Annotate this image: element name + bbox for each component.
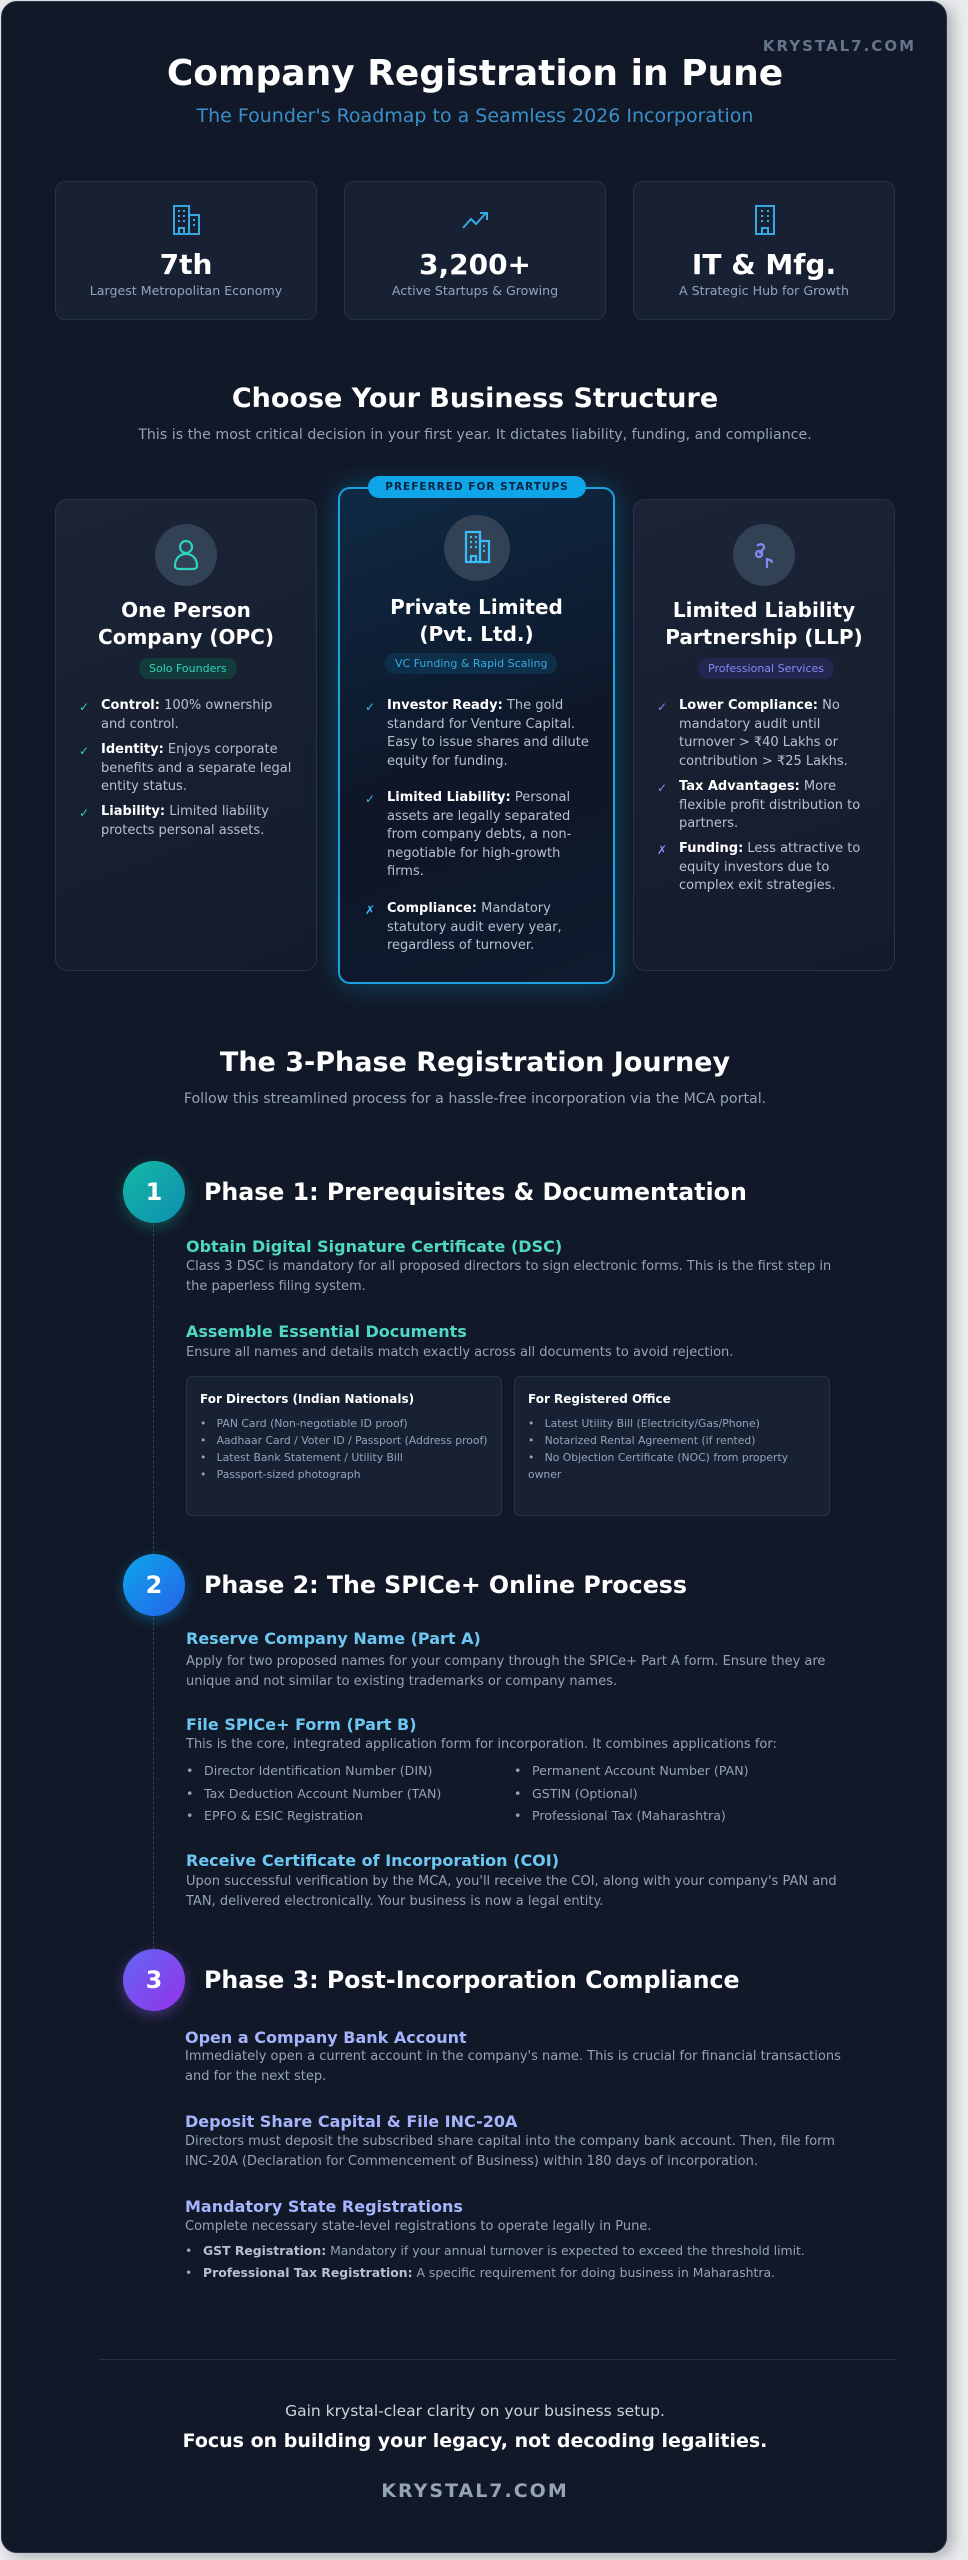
- stat: 7th: 7th: [160, 248, 212, 281]
- phase 2: File SPICe+ Form (Part B): [186, 1715, 417, 1734]
- doc box: directors: Latest Bank Statement / Utility Bill: [217, 1451, 403, 1464]
- panel: OPC: ✓: [79, 744, 89, 758]
- phase 3 badge: [123, 1949, 185, 2011]
- panel: Private Limited: ✓: [365, 792, 375, 806]
- phase 2 badge: [123, 1554, 185, 1616]
- phase 2: Permanent Account Number (PAN): [532, 1763, 749, 1778]
- phase 3: Immediately open a current account in the company's name. This is crucial for financial transactions and for the next step.: [185, 2049, 841, 2084]
- panel: Private Limited: (Pvt. Ltd.): [419, 622, 534, 646]
- phase 2: Upon successful verification by the MCA, you'll receive the COI, along with your company's PAN and TAN, delivered electronically. Your business is now a legal entity.: [186, 1874, 837, 1909]
- panel: OPC: Control: 100% ownership and control.: [101, 698, 272, 732]
- doc box: office: [514, 1376, 830, 1516]
- subheading: This is the most critical decision in your first year. It dictates liability, funding, and compliance.: [138, 427, 812, 443]
- stat: 3,200+: 3,200+: [419, 248, 531, 281]
- stat: 7th: Largest Metropolitan Economy: [90, 283, 282, 298]
- icon: handshake: [733, 524, 795, 586]
- panel: LLP: Lower Compliance: No mandatory audit until turnover > ₹40 Lakhs or contribution > ₹25 Lakhs.: [679, 698, 848, 768]
- panel: LLP: ✗: [657, 843, 667, 857]
- phase 3: Mandatory State Registrations: [185, 2197, 463, 2216]
- phase 2: Tax Deduction Account Number (TAN): [204, 1786, 441, 1801]
- stat: IT & Mfg: [633, 181, 895, 320]
- panel: OPC: One Person: [121, 598, 251, 622]
- panel: OPC: Identity: Enjoys corporate benefits and a separate legal entity status.: [101, 742, 291, 794]
- panel: Private Limited: Compliance: Mandatory statutory audit every year, regardless of turnover.: [387, 901, 562, 953]
- panel: LLP: ✓: [657, 781, 667, 795]
- doc box: office: Latest Utility Bill (Electricity/Gas/Phone): [545, 1417, 760, 1430]
- stat: 3,200+: [344, 181, 606, 320]
- panel: OPC: ✓: [79, 806, 89, 820]
- heading: journey: The 3-Phase Registration Journey: [220, 1047, 730, 1078]
- doc box: office: For Registered Office: [528, 1392, 671, 1406]
- footer: Gain krystal-clear clarity on your business setup.: [285, 2402, 665, 2420]
- phase 3: Directors must deposit the subscribed share capital into the company bank account. Then, file form INC-20A (Declaration for Commencement of Business) within 180 days of incorporation.: [185, 2134, 835, 2169]
- footer: [183, 2402, 767, 2502]
- icon: buildings: [444, 515, 510, 581]
- panel: Private Limited: [338, 487, 615, 984]
- phase 2: Receive Certificate of Incorporation (COI): [186, 1851, 559, 1870]
- panel: Private Limited: ✓: [365, 700, 375, 714]
- phase 2: Apply for two proposed names for your company through the SPICe+ Part A form. Ensure they are unique and not similar to existing trademarks or company names.: [186, 1654, 825, 1689]
- phase 2: This is the core, integrated application form for incorporation. It combines applications for:: [186, 1737, 777, 1752]
- panel: Private Limited: Private Limited: [390, 595, 563, 619]
- panel: Private Limited: VC Funding & Rapid Scaling: [395, 657, 547, 670]
- stat: 7th: [55, 181, 317, 320]
- panel: LLP: ✓: [657, 700, 667, 714]
- phase 1: Assemble Essential Documents: [186, 1322, 467, 1341]
- panel: LLP: Professional Services: [708, 662, 824, 675]
- phase 2: [116, 1551, 837, 1909]
- phase 1: Phase 1: Prerequisites & Documentation: [204, 1178, 747, 1206]
- phase 2: Director Identification Number (DIN): [204, 1763, 432, 1778]
- phase 1: Obtain Digital Signature Certificate (DSC): [186, 1237, 562, 1256]
- phase 3: Deposit Share Capital & File INC-20A: [185, 2112, 517, 2131]
- journey subheading: Follow this streamlined process for a hassle-free incorporation via the MCA portal.: [184, 1091, 766, 1107]
- stat: IT & Mfg: A Strategic Hub for Growth: [679, 283, 849, 298]
- panel: LLP: [633, 499, 895, 971]
- panel: LLP: Funding: Less attractive to equity investors due to complex exit strategies.: [679, 841, 860, 893]
- phase 2: Reserve Company Name (Part A): [186, 1629, 481, 1648]
- doc box: directors: Aadhaar Card / Voter ID / Passport (Address proof): [217, 1434, 488, 1447]
- phase 3: Professional Tax Registration: A specific requirement for doing business in Maharashtra.: [203, 2265, 775, 2280]
- phase 1: [117, 1159, 831, 1360]
- phase 2: Phase 2: The SPICe+ Online Process: [204, 1571, 687, 1599]
- doc box: office: No Objection Certificate (NOC) from property owner: [528, 1451, 788, 1481]
- icon: trend: [462, 212, 488, 229]
- doc box: office: Notarized Rental Agreement (if rented): [545, 1434, 756, 1447]
- heading: business structure: Choose Your Business Structure: [232, 383, 718, 414]
- phase 2: Professional Tax (Maharashtra): [532, 1808, 726, 1823]
- phase 1: Class 3 DSC is mandatory for all proposed directors to sign electronic forms. This is the first step in the paperless filing system.: [186, 1259, 831, 1294]
- panel: Private Limited: ✗: [365, 903, 375, 917]
- panel: OPC: [55, 499, 317, 971]
- phase 3: [116, 1946, 841, 2280]
- panel: LLP: Limited Liability: [673, 598, 855, 622]
- stat: IT & Mfg: IT & Mfg.: [692, 248, 836, 281]
- title: Company Registration in Pune: [167, 53, 783, 94]
- phase 3: Complete necessary state-level registrations to operate legally in Pune.: [185, 2219, 651, 2234]
- doc box: directors: For Directors (Indian Nationals): [200, 1392, 414, 1406]
- panel: OPC: Company (OPC): [98, 625, 274, 649]
- badge: preferred for startups: [368, 476, 586, 498]
- icon: building: [755, 205, 775, 235]
- panel: LLP: Partnership (LLP): [665, 625, 863, 649]
- phase 2: EPFO & ESIC Registration: [204, 1808, 363, 1823]
- footer: KRYSTAL7.COM: [381, 2480, 569, 2502]
- phase 1 badge: 1: [146, 1178, 162, 1206]
- doc box: directors: Passport-sized photograph: [217, 1468, 361, 1481]
- phase 2: GSTIN (Optional): [532, 1786, 638, 1801]
- panel: LLP: Tax Advantages: More flexible profit distribution to partners.: [679, 779, 860, 831]
- panel: OPC: ✓: [79, 700, 89, 714]
- icon: buildings: [173, 205, 200, 235]
- subtitle: The Founder's Roadmap to a Seamless 2026 Incorporation: [197, 105, 753, 127]
- panel: Private Limited: Investor Ready: The gold standard for Venture Capital. Easy to issue shares and dilute equity for funding.: [387, 698, 589, 768]
- panel: OPC: Liability: Limited liability protects personal assets.: [101, 804, 269, 838]
- panel: Private Limited: Limited Liability: Personal assets are legally separated from company debts, a non-negotiable for high-growth firms.: [387, 790, 571, 879]
- phase 2 badge: 2: [146, 1571, 162, 1599]
- phase 3 badge: 3: [146, 1966, 162, 1994]
- doc box: directors: [186, 1376, 502, 1516]
- phase 1: Ensure all names and details match exactly across all documents to avoid rejection.: [186, 1345, 733, 1360]
- icon: person: [155, 524, 217, 586]
- panel: OPC: Solo Founders: [149, 662, 227, 675]
- phase 3: Open a Company Bank Account: [185, 2028, 467, 2047]
- phase 3: GST Registration: Mandatory if your annual turnover is expected to exceed the threshold limit.: [203, 2243, 805, 2258]
- stat: 3,200+: Active Startups & Growing: [392, 283, 558, 298]
- footer: Focus on building your legacy, not decoding legalities.: [183, 2430, 767, 2452]
- phase 3: Phase 3: Post-Incorporation Compliance: [204, 1966, 740, 1994]
- brand top right: KRYSTAL7.COM: [763, 37, 916, 55]
- badge: preferred for startups: PREFERRED FOR STARTUPS: [385, 481, 569, 493]
- doc box: directors: PAN Card (Non-negotiable ID proof): [217, 1417, 408, 1430]
- phase 1 badge: [123, 1161, 185, 1223]
